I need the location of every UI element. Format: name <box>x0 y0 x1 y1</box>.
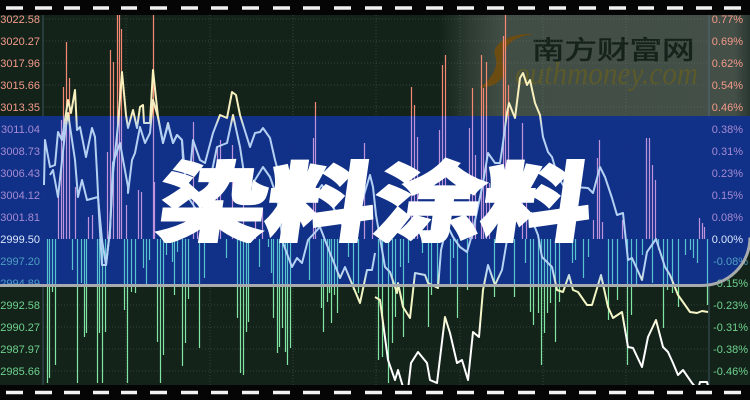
top film strip <box>0 0 750 15</box>
right percent axis: 0.46% <box>712 102 743 114</box>
right percent axis: 0.15% <box>712 190 743 202</box>
right percent axis <box>712 14 748 378</box>
blue title band <box>0 116 750 285</box>
right percent axis: 0.77% <box>712 14 743 26</box>
right percent axis: -0.15% <box>713 278 748 290</box>
left price axis: 3001.81 <box>0 212 40 224</box>
right percent axis: 0.23% <box>712 168 743 180</box>
right percent axis: 0.69% <box>712 36 743 48</box>
left price axis: 3020.27 <box>0 36 40 48</box>
left price axis: 3004.12 <box>0 190 40 202</box>
right percent axis: 0.38% <box>712 124 743 136</box>
left price axis: 3017.96 <box>0 58 40 70</box>
band outline <box>0 238 750 286</box>
left price axis: 3015.66 <box>0 80 40 92</box>
left price axis: 3008.73 <box>0 146 40 158</box>
falling bars <box>48 239 708 383</box>
right percent axis: -0.38% <box>713 344 748 356</box>
left price axis: 3006.43 <box>0 168 40 180</box>
right percent axis: -0.46% <box>713 366 748 378</box>
right percent axis: 0.00% <box>712 234 743 246</box>
watermark domain: outhmoney.com <box>515 55 698 91</box>
watermark Chinese name: 南方财富网 <box>532 36 694 65</box>
right percent axis: 0.62% <box>712 58 743 70</box>
watermark panel <box>440 15 750 120</box>
title: 染料涂料 <box>152 156 597 254</box>
left price axis: 2990.27 <box>0 322 40 334</box>
left price axis <box>0 14 40 378</box>
right percent axis: -0.23% <box>713 300 748 312</box>
left price axis: 2985.66 <box>0 366 40 378</box>
right percent axis: 0.08% <box>712 212 743 224</box>
left price axis: 3013.35 <box>0 102 40 114</box>
right percent axis: -0.08% <box>713 256 748 268</box>
left price axis: 3022.58 <box>0 14 40 26</box>
right percent axis: 0.54% <box>712 80 743 92</box>
index trend lines <box>44 70 709 390</box>
left price axis: 2994.89 <box>0 278 40 290</box>
left price axis: 3011.04 <box>1 124 40 136</box>
rising bars <box>58 15 704 239</box>
left price axis: 2997.20 <box>0 256 40 268</box>
watermark logo: southmoney <box>479 34 698 91</box>
left price axis: 2987.97 <box>0 344 40 356</box>
left price axis: 2999.50 <box>0 234 40 246</box>
left price axis: 2992.58 <box>0 300 40 312</box>
right percent axis: -0.31% <box>713 322 748 334</box>
logo swoosh S <box>479 34 535 88</box>
bottom film strip <box>0 385 750 400</box>
right percent axis: 0.31% <box>712 146 743 158</box>
